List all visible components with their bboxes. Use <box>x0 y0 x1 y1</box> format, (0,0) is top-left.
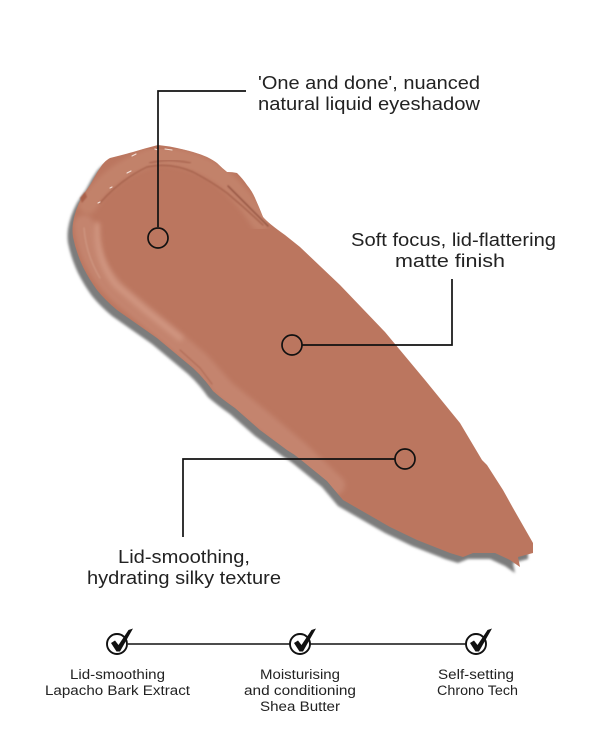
icon: check 2 <box>290 628 316 654</box>
callout: one and done: 'One and done', nuanced <box>258 73 480 93</box>
text: shea butter: Shea Butter <box>260 699 341 714</box>
text: chrono tech: Self-setting <box>438 667 514 682</box>
swatch: eyeshadow smear <box>68 145 533 573</box>
callout: one and done <box>148 73 481 248</box>
callout: matte finish: matte finish <box>395 251 505 271</box>
text: lapacho bark extract: Lapacho Bark Extract <box>45 683 190 698</box>
callout: one and done: natural liquid eyeshadow <box>258 94 481 114</box>
connector line <box>128 643 467 645</box>
callout: matte finish <box>282 230 556 355</box>
icon: check 3 <box>466 628 492 654</box>
text: shea butter: Moisturising <box>260 667 340 682</box>
text: lapacho bark extract <box>45 667 190 698</box>
callout: silky texture: Lid-smoothing, <box>118 547 250 567</box>
text: lapacho bark extract: Lid-smoothing <box>70 667 165 682</box>
infographic <box>46 76 555 711</box>
text: chrono tech <box>437 667 518 698</box>
callout: silky texture: hydrating silky texture <box>87 568 281 588</box>
text: chrono tech: Chrono Tech <box>437 683 518 698</box>
callout: silky texture <box>87 449 415 588</box>
text: shea butter <box>244 667 356 714</box>
text: shea butter: and conditioning <box>244 683 356 698</box>
callout: matte finish: Soft focus, lid-flattering <box>351 230 556 250</box>
icon: check 1 <box>107 628 133 654</box>
